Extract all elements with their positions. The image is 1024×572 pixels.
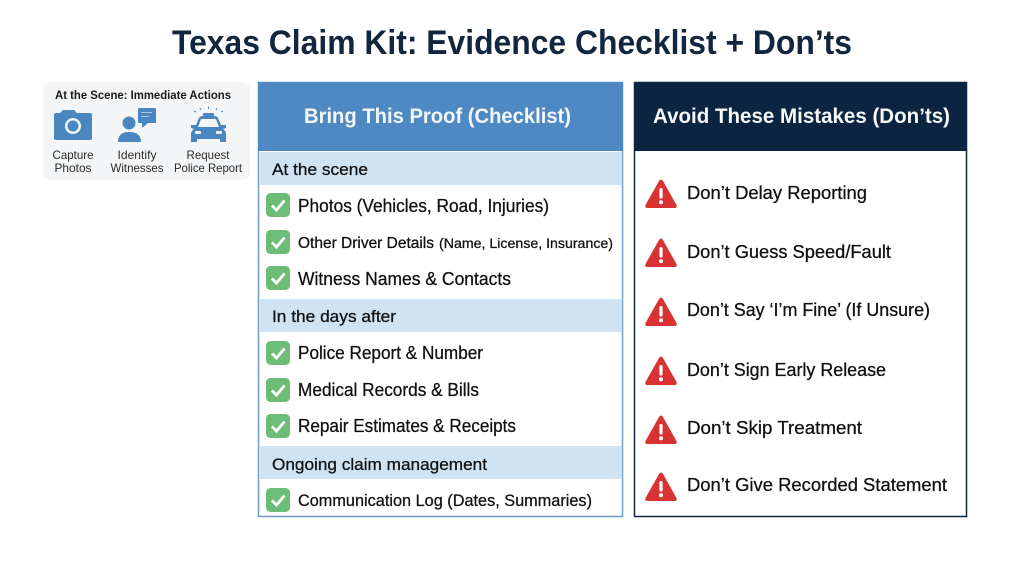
panel: checklist: Other Driver Details [298,235,434,252]
item: say I'm fine [645,298,677,326]
panel: don'ts: Don’t Give Recorded Statement [687,475,947,495]
panel: checklist: Photos (Vehicles, Road, Injuries) [298,196,549,216]
panel: checklist: Bring This Proof (Checklist) [304,105,571,128]
panel: don'ts: Don’t Sign Early Release [687,360,886,380]
panel: checklist: Medical Records & Bills [298,380,479,400]
item: other driver details [266,230,290,254]
icon labels [52,148,243,175]
panel: checklist: Communication Log (Dates, Summaries) [298,491,592,510]
section: at the scene [259,152,622,185]
panel: checklist: Ongoing claim management [272,455,487,474]
item: guess speed [645,238,677,267]
panel: don'ts [634,82,967,516]
item: sign early release [645,356,677,385]
title: Texas Claim Kit: Evidence Checklist + Don’ts [172,24,852,62]
item: recorded statement [645,472,677,501]
don'ts header [634,82,967,151]
panel: don'ts: Avoid These Mistakes (Don’ts) [653,105,950,128]
icon labels: Request [186,148,230,162]
item: medical records [266,378,290,402]
section: in the days after [259,299,622,332]
icon labels: Photos [54,161,92,175]
icon labels: Witnesses [110,161,164,175]
card heading: At the Scene: Immediate Actions [55,88,231,102]
checklist header [258,82,623,151]
panel: don'ts: Don’t Guess Speed/Fault [687,242,891,262]
panel: checklist: Police Report & Number [298,343,483,363]
panel: don'ts: Don’t Skip Treatment [687,418,862,438]
panel: checklist [258,82,623,516]
item: photos [266,193,290,217]
icon labels: Capture [52,148,94,162]
panel: at the scene immediate actions [43,82,250,180]
item: repair estimates [266,414,290,438]
item: delay reporting [645,180,677,208]
item: communication log [266,488,290,512]
icon labels: Identify [118,148,156,162]
panel: checklist: Witness Names & Contacts [298,269,511,289]
item: skip treatment [645,416,677,444]
panel: don'ts: Don’t Delay Reporting [687,183,867,203]
icon: police car [191,106,226,142]
panel: checklist: Repair Estimates & Receipts [298,416,516,436]
item: witness names [266,266,290,290]
panel: don'ts: Don’t Say ‘I’m Fine’ (If Unsure) [687,300,930,320]
panel: checklist: (Name, License, Insurance) [439,235,613,251]
icon: witness with speech bubble [118,108,156,142]
section: ongoing claim management [259,446,622,479]
panel: checklist: In the days after [272,307,396,326]
icon: camera [54,110,92,140]
panel: checklist: At the scene [272,160,368,179]
item: police report [266,341,290,365]
icon labels: Police Report [174,161,243,175]
